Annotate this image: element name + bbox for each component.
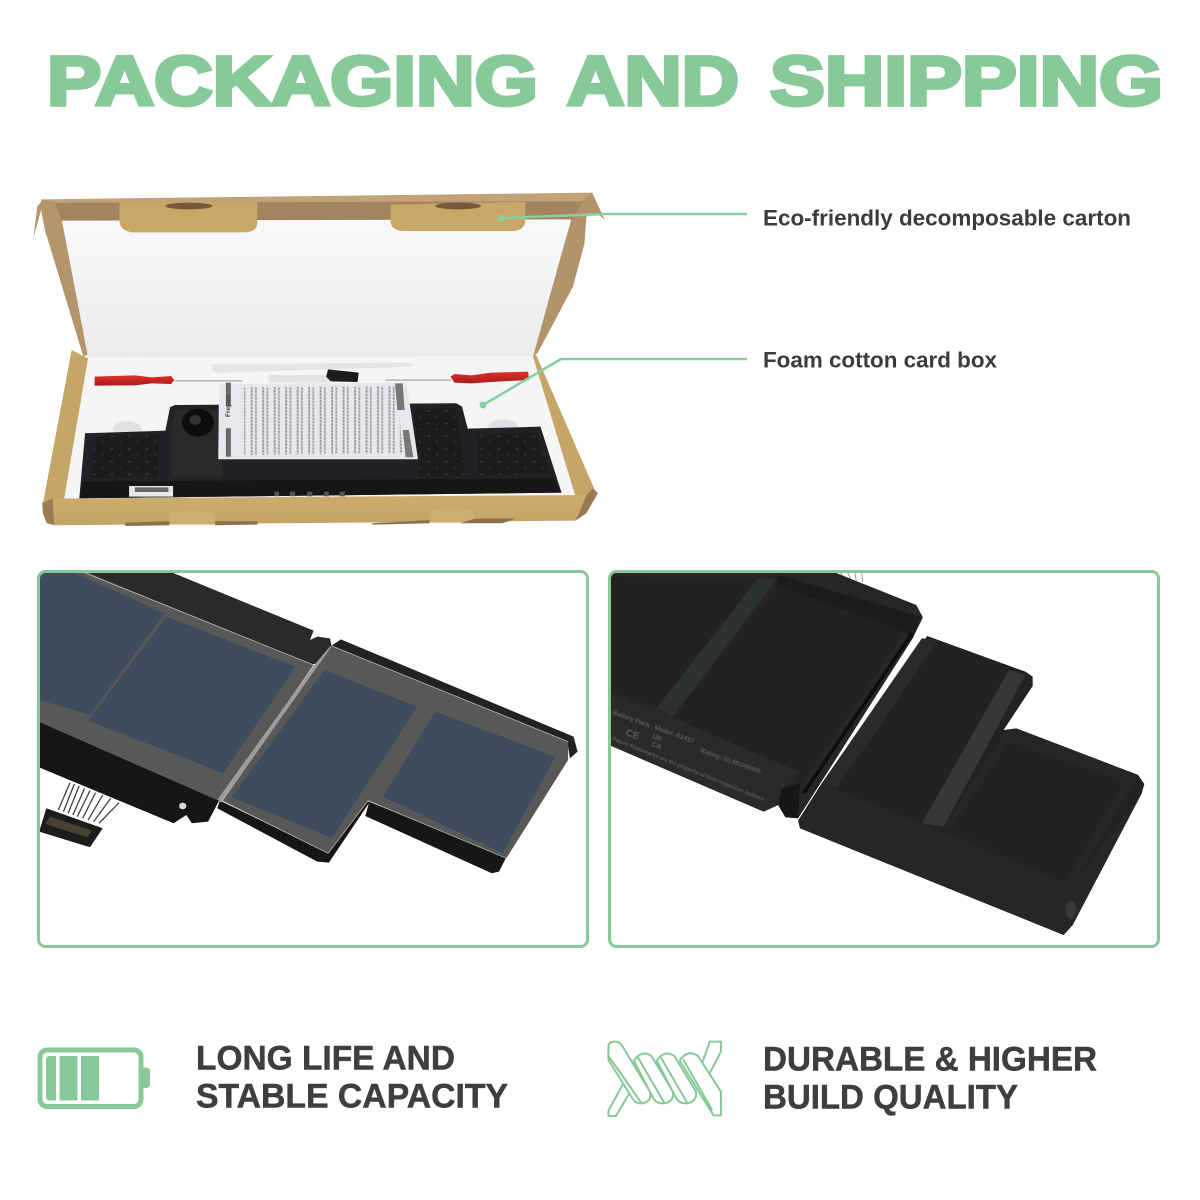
title [47, 42, 1163, 120]
rear dark plate [85, 572, 332, 665]
film right section [223, 646, 568, 858]
front edge [217, 801, 506, 873]
lid slots [165, 203, 212, 209]
rating label text: CA [650, 741, 662, 751]
base side right [533, 352, 594, 495]
feature text: durable: DURABLE & HIGHER [763, 1040, 1097, 1078]
rating label text: UK [651, 733, 663, 743]
main section [609, 572, 923, 818]
battery marks [274, 492, 345, 496]
strip b [922, 670, 1025, 827]
panel: battery front view [38, 572, 588, 946]
carton lid rim [41, 193, 604, 219]
film highlight [85, 573, 314, 665]
carton left fold [33, 199, 88, 356]
feature text: long life [196, 1040, 508, 1116]
photo: blue cell side [39, 572, 578, 873]
cell left [609, 577, 756, 707]
cell 2 [88, 617, 295, 773]
icon: twisted wire [608, 1042, 721, 1116]
screwdriver left [95, 375, 242, 386]
section two body [798, 636, 1144, 935]
rating label text: Model: A1417 [653, 724, 695, 745]
hinge [778, 783, 800, 818]
rating label text: Battery Pack [611, 709, 651, 729]
base side left [43, 350, 88, 503]
lower black rail [39, 722, 219, 823]
tray recesses [211, 363, 412, 373]
cell center [673, 586, 904, 784]
photo: black cell side [609, 572, 1144, 935]
carton end right [576, 488, 598, 521]
sheet brand text: Freyun [225, 395, 232, 417]
flap slots [125, 521, 169, 526]
title: PACKAGING [47, 42, 538, 120]
title: SHIPPING [770, 42, 1163, 120]
end notch [1065, 901, 1076, 919]
leader line: carton [498, 214, 747, 222]
connector wires [58, 783, 119, 823]
rating label text: Rating: 10.95V/95Wh [699, 747, 762, 776]
panel border [38, 572, 588, 946]
panel: battery back view [609, 572, 1158, 946]
strip [656, 578, 776, 717]
feature text: long life: STABLE CAPACITY [196, 1078, 508, 1116]
photo: open carton with battery [33, 193, 604, 526]
wires [840, 573, 863, 582]
white lid liner [62, 219, 571, 358]
screwdriver right [385, 372, 529, 383]
feature text: durable: BUILD QUALITY [763, 1078, 1018, 1116]
film left section [39, 572, 314, 801]
lid tab left [120, 202, 257, 232]
label band [609, 693, 802, 812]
light fold strip [218, 646, 333, 803]
lid tab right [390, 202, 525, 231]
screw [179, 803, 186, 809]
cell 3 [232, 670, 417, 838]
foam tray [64, 356, 575, 500]
cell 4 [383, 712, 555, 853]
connector [39, 808, 103, 847]
lighter last cell [1013, 728, 1138, 775]
rear edge right [331, 639, 578, 758]
black clip [326, 369, 359, 382]
strip a [822, 638, 939, 788]
label: foam: Foam cotton card box [763, 348, 998, 372]
cell 1 [39, 572, 165, 715]
title: AND [567, 42, 739, 120]
frame top [776, 575, 920, 638]
instruction sheet [218, 383, 418, 459]
icon: battery [40, 1050, 150, 1106]
battery in tray [79, 403, 562, 498]
label: carton: Eco-friendly decomposable carton [763, 206, 1131, 230]
feature text: durable [763, 1040, 1097, 1116]
rating label text: CE [624, 727, 641, 743]
front flap tabs [169, 511, 215, 525]
leader line: foam [480, 359, 747, 408]
battery label [129, 486, 173, 497]
rating label text: Patent Trademarks are the property of their respective holders [611, 736, 765, 803]
panel border [610, 572, 1158, 946]
carton front flap [53, 495, 586, 525]
carton end left [42, 498, 54, 525]
feature text: long life: LONG LIFE AND [196, 1040, 455, 1078]
carton right fold [533, 193, 604, 355]
lid inner band [54, 201, 583, 222]
front curved band [798, 783, 1142, 935]
frame side [804, 633, 912, 793]
